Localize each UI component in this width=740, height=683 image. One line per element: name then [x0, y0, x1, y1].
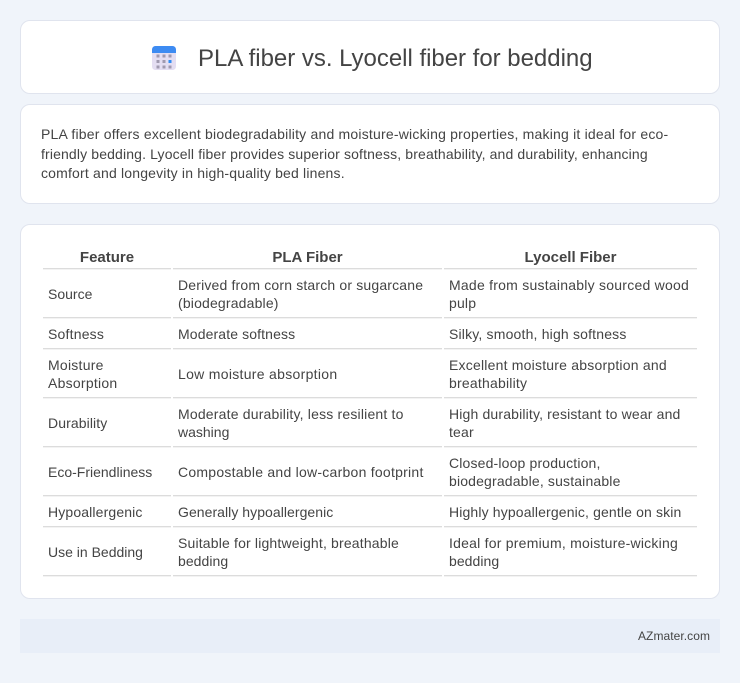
- table header: [80, 249, 616, 266]
- row: softness: Moderate softness: [178, 326, 295, 342]
- summary text: PLA fiber offers excellent biodegradability and moisture-wicking properties, making it ideal for eco-: [41, 126, 668, 142]
- row: moisture absorption: Low moisture absorption: [178, 366, 337, 382]
- table header: PLA Fiber: [272, 249, 343, 266]
- footer bar: [20, 619, 720, 653]
- summary panel: [20, 104, 720, 204]
- row: eco-friendliness: Eco-Friendliness: [48, 464, 152, 480]
- row: hypoallergenic: [48, 504, 681, 520]
- row: durability: [48, 406, 680, 440]
- icon: calendar: [152, 46, 176, 70]
- row: source: Made from sustainably sourced wood: [449, 277, 689, 293]
- summary text: [41, 126, 668, 181]
- row: durability: High durability, resistant to wear and: [449, 406, 680, 422]
- row: use in bedding: bedding: [449, 553, 499, 569]
- table header: Lyocell Fiber: [524, 249, 616, 266]
- row: moisture absorption: Absorption: [48, 375, 117, 391]
- row: eco-friendliness: biodegradable, sustainable: [449, 473, 621, 489]
- row: hypoallergenic: Generally hypoallergenic: [178, 504, 333, 520]
- row: eco-friendliness: Compostable and low-carbon footprint: [178, 464, 424, 480]
- row: eco-friendliness: Closed-loop production,: [449, 455, 601, 471]
- row: use in bedding: Ideal for premium, moisture-wicking: [449, 535, 678, 551]
- row: hypoallergenic: Highly hypoallergenic, gentle on skin: [449, 504, 681, 520]
- row: source: (biodegradable): [178, 295, 279, 311]
- row: use in bedding: Suitable for lightweight, breathable: [178, 535, 399, 551]
- row: use in bedding: [48, 535, 678, 569]
- row: source: [48, 277, 689, 311]
- row: moisture absorption: [48, 357, 667, 391]
- row: durability: tear: [449, 424, 474, 440]
- table header: Feature: [80, 249, 134, 266]
- row: softness: Silky, smooth, high softness: [449, 326, 627, 342]
- row: use in bedding: bedding: [178, 553, 228, 569]
- row: hypoallergenic: Hypoallergenic: [48, 504, 143, 520]
- row: eco-friendliness: [48, 455, 621, 489]
- row: moisture absorption: Moisture: [48, 357, 104, 373]
- summary text: friendly bedding. Lyocell fiber provides superior softness, breathability, and durability, enhancing: [41, 146, 648, 162]
- row: softness: Softness: [48, 326, 104, 342]
- row: softness: [48, 326, 627, 342]
- row: source: Source: [48, 286, 92, 302]
- header panel: [20, 20, 720, 94]
- row: source: Derived from corn starch or sugarcane: [178, 277, 423, 293]
- panel: comparison table: [20, 224, 720, 599]
- title: PLA fiber vs. Lyocell fiber for bedding: [198, 45, 593, 72]
- row: durability: washing: [178, 424, 229, 440]
- row: source: pulp: [449, 295, 476, 311]
- row: use in bedding: Use in Bedding: [48, 544, 143, 560]
- row: moisture absorption: Excellent moisture absorption and: [449, 357, 667, 373]
- row: durability: Moderate durability, less resilient to: [178, 406, 404, 422]
- footer text: AZmater.com: [638, 629, 710, 643]
- row: moisture absorption: breathability: [449, 375, 527, 391]
- summary text: comfort and longevity in high-quality bed linens.: [41, 165, 345, 181]
- row: durability: Durability: [48, 415, 107, 431]
